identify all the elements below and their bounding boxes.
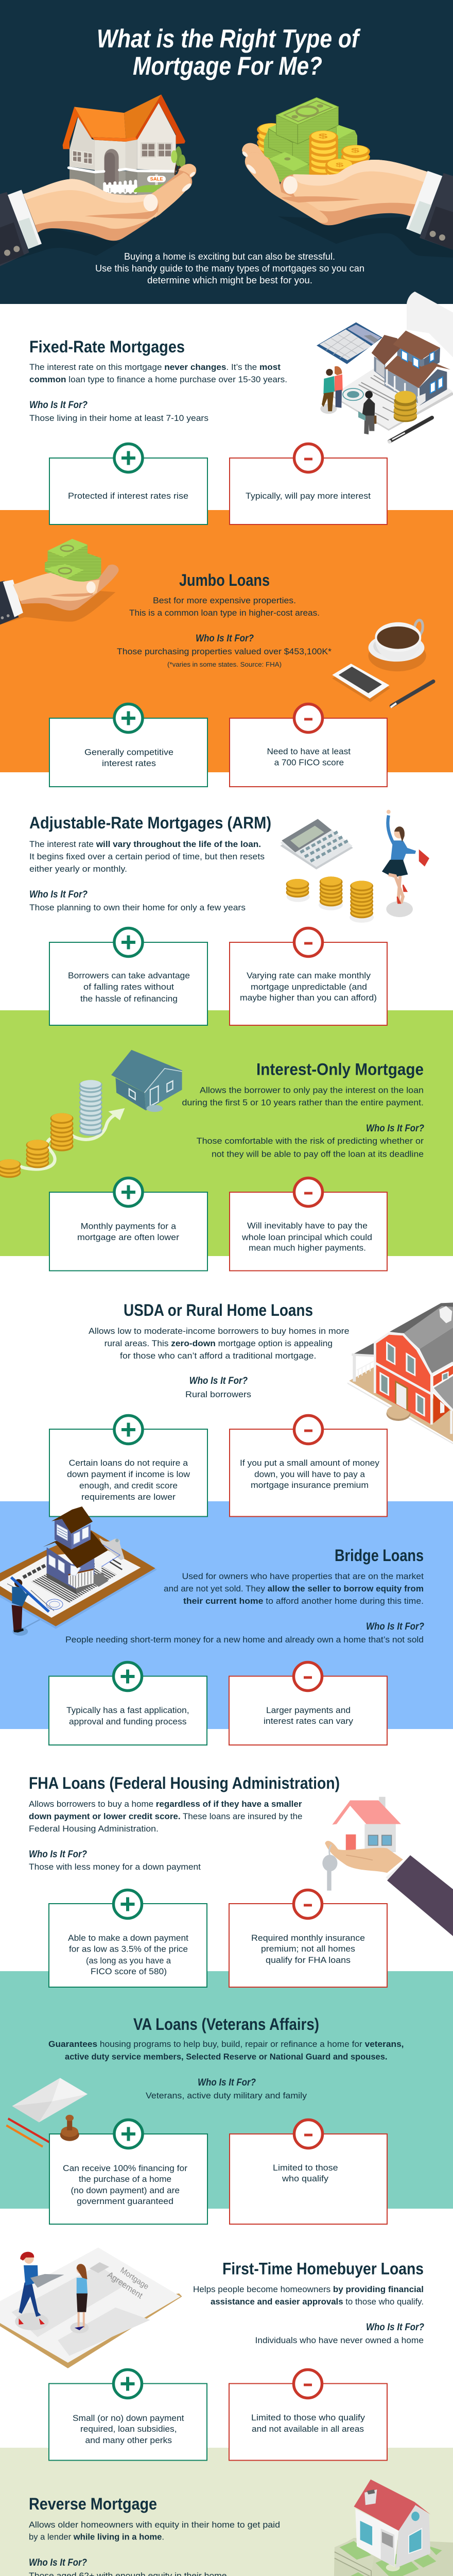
band: VA teal — [0, 1971, 453, 2209]
who is it for: Those planning to own their home for only a few years — [29, 903, 246, 912]
band: interest-only green — [0, 1010, 453, 1256]
icon: coffee cup, phone and pen — [332, 620, 433, 707]
icon: hand holding house and keys — [322, 1797, 410, 1891]
pro card: Protected if interest rates rise — [68, 492, 188, 501]
heading: Jumbo Loans — [179, 571, 270, 589]
body text — [29, 1799, 303, 1834]
pro card: mortgage are often lower — [77, 1233, 180, 1242]
con card: whole loan principal which could — [241, 1233, 372, 1242]
body text: their current home to afford another home during this time. — [183, 1596, 424, 1606]
body text: active duty service members, Selected Reserve or National Guard and spouses. — [65, 2052, 387, 2062]
who is it for: Who Is It For? — [29, 400, 88, 411]
con card: down, you will have to pay a — [254, 1470, 365, 1479]
pro card — [49, 1662, 207, 1745]
pro card: Able to make a down payment — [68, 1934, 188, 1943]
heading: Adjustable-Rate Mortgages (ARM) — [29, 814, 271, 832]
body text: The interest rate on this mortgage never changes. It’s the most — [29, 362, 281, 372]
panel: adjustable-rate mortgages — [29, 810, 429, 1025]
con card: interest rates can vary — [264, 1717, 354, 1726]
heading: Interest-Only Mortgage — [256, 1060, 424, 1079]
who is it for: Who Is It For? — [189, 1376, 248, 1386]
pro card: government guaranteed — [77, 2197, 173, 2206]
intro text — [95, 251, 364, 285]
con card: who qualify — [282, 2174, 329, 2183]
con card: Need to have at least — [267, 747, 351, 756]
who is it for: Who Is It For? — [29, 889, 88, 900]
pro card: interest rates — [102, 759, 156, 768]
con card: a 700 FICO score — [274, 758, 344, 768]
con card: maybe higher than you can afford) — [240, 993, 377, 1003]
icon: envelope and pencils — [6, 2078, 88, 2147]
icon: calculator, house, people and document — [317, 292, 453, 444]
body text — [129, 596, 320, 618]
icon: house on money — [334, 2480, 453, 2576]
who is it for — [29, 2557, 226, 2576]
pro card: Typically has a fast application, — [66, 1706, 189, 1715]
body text: down payment or lower credit score. These loans are insured by the — [29, 1811, 303, 1821]
con card: If you put a small amount of money — [240, 1459, 380, 1468]
heading: VA Loans (Veterans Affairs) — [133, 2015, 319, 2033]
con card: Required monthly insurance — [251, 1934, 365, 1943]
con card — [230, 2120, 387, 2224]
body text: Allows older homeowners with equity in their home to get paid — [29, 2520, 280, 2530]
heading: Bridge Loans — [335, 1546, 424, 1565]
title — [97, 24, 361, 80]
pro card: (as long as you have a — [86, 1956, 171, 1965]
body text: Allows low to moderate-income borrowers to buy homes in more — [89, 1326, 349, 1336]
con card: Limited to those who qualify — [251, 2413, 365, 2422]
body text: for those who can’t afford a traditional mortgage. — [120, 1351, 316, 1361]
pro card: Certain loans do not require a — [69, 1459, 188, 1468]
pro card: Borrowers can take advantage — [68, 971, 190, 980]
who is it for: Who Is It For? — [29, 1849, 87, 1860]
pro card — [49, 704, 207, 787]
con card — [230, 1416, 387, 1517]
con card — [230, 928, 387, 1025]
who is it for — [255, 2322, 424, 2345]
con card: Larger payments and — [266, 1706, 351, 1715]
pro card — [49, 444, 207, 524]
who is it for: People needing short-term money for a new home and already own a home that’s not sold — [65, 1635, 424, 1645]
pro card: approval and funding process — [69, 1717, 186, 1726]
icon: house on clipboard with man — [0, 1506, 157, 1636]
body text — [164, 1571, 424, 1606]
body text — [29, 362, 287, 384]
who is it for: Individuals who have never owned a home — [255, 2335, 424, 2345]
body text — [29, 2520, 280, 2542]
who is it for: Rural borrowers — [185, 1389, 251, 1399]
con card — [229, 1662, 387, 1745]
icon: suit sleeve — [387, 1855, 453, 1936]
intro text: determine which might be best for you. — [147, 275, 312, 285]
icon: red barn house — [347, 1302, 453, 1444]
who is it for: not they will be able to pay off the loan at its deadline — [212, 1149, 424, 1159]
who is it for — [29, 1849, 201, 1872]
icon: right hand holding money and coins: $ — [351, 147, 360, 154]
pro card: for as low as 3.5% of the price — [69, 1944, 188, 1954]
icon: right hand holding money and coins — [241, 97, 453, 258]
icon: mortgage agreement book with two women and key: Agreement — [106, 2270, 144, 2301]
icon: left hand holding house: SALE — [150, 177, 163, 182]
who is it for: Those living in their home at least 7-10 years — [29, 413, 208, 423]
pro card: the purchase of a home — [79, 2175, 171, 2184]
con card: mortgage unpredictable (and — [251, 982, 367, 992]
panel: fixed-rate mortgages — [29, 292, 453, 524]
body text: Allows borrowers to buy a home regardless of if they have a smaller — [29, 1799, 302, 1809]
pro card — [49, 2370, 207, 2461]
con card — [229, 1890, 387, 1987]
icon: coins path to house — [0, 1050, 183, 1178]
icon: calculator, coins and jumping woman — [280, 810, 429, 923]
body text: Best for more expensive properties. — [153, 596, 296, 605]
pro card — [49, 1890, 207, 1987]
heading: FHA Loans (Federal Housing Administration) — [29, 1774, 340, 1792]
body text: This is a common loan type in higher-cost areas. — [129, 608, 320, 618]
pro card: and many other perks — [85, 2436, 172, 2445]
con card: and not available in all areas — [252, 2425, 364, 2434]
body text: rural areas. This zero-down mortgage option is appealing — [104, 1338, 333, 1348]
panel: reverse mortgage — [29, 2480, 453, 2576]
con card: Typically, will pay more interest — [246, 492, 371, 501]
band: hero background — [0, 0, 453, 304]
con card: Will inevitably have to pay the — [247, 1221, 368, 1230]
band: reverse sage — [0, 2448, 453, 2576]
who is it for — [117, 633, 332, 668]
pro card: enough, and credit score — [79, 1481, 178, 1490]
heading: USDA or Rural Home Loans — [124, 1301, 313, 1319]
who is it for: Veterans, active duty military and family — [146, 2091, 307, 2100]
icon: stamp — [60, 2115, 79, 2141]
panel: interest-only mortgage — [0, 1050, 424, 1270]
who is it for: Who Is It For? — [198, 2077, 256, 2088]
pro card: Generally competitive — [84, 748, 173, 757]
who is it for: Those comfortable with the risk of predicting whether or — [197, 1136, 424, 1146]
icon: mortgage agreement book with two women and key: Mortgage — [119, 2266, 150, 2292]
body text: by a lender while living in a home. — [29, 2532, 164, 2542]
pro card: Monthly payments for a — [81, 1222, 177, 1231]
title: Mortgage For Me? — [133, 52, 322, 80]
body text: either yearly or monthly. — [29, 864, 127, 874]
who is it for — [29, 889, 246, 912]
pro card — [49, 928, 207, 1025]
panel: USDA or rural home loans — [49, 1301, 453, 1517]
who is it for: Who Is It For? — [196, 633, 254, 644]
panel: jumbo loans — [0, 539, 433, 787]
who is it for: Who Is It For? — [29, 2557, 87, 2568]
band: jumbo orange — [0, 510, 453, 772]
who is it for — [29, 400, 208, 423]
icon: hand holding money — [0, 539, 119, 635]
pro card — [49, 1178, 207, 1270]
pro card: down payment if income is low — [67, 1470, 190, 1479]
con card — [230, 1178, 387, 1270]
con card: qualify for FHA loans — [266, 1956, 351, 1965]
con card — [230, 444, 387, 524]
body text: and are not yet sold. They allow the seller to borrow equity from — [164, 1584, 424, 1594]
who is it for — [197, 1123, 424, 1159]
body text — [89, 1326, 349, 1361]
pro card — [49, 2120, 207, 2224]
con card: Varying rate can make monthly — [247, 971, 371, 980]
title: What is the Right Type of — [97, 24, 361, 53]
body text — [29, 839, 265, 874]
who is it for: Who Is It For? — [366, 2322, 424, 2333]
panel: FHA loans — [29, 1774, 453, 1987]
who is it for — [185, 1376, 251, 1399]
icon: mortgage agreement book with two women and key — [0, 2247, 182, 2368]
pro card: of falling rates without — [83, 982, 174, 992]
body text: Federal Housing Administration. — [29, 1824, 159, 1834]
body text: The interest rate will vary throughout the life of the loan. — [29, 839, 261, 849]
panel: first-time homebuyer loans — [0, 2247, 424, 2461]
intro text: Use this handy guide to the many types of mortgages so you can — [95, 263, 364, 274]
who is it for — [146, 2077, 307, 2100]
con card: mortgage insurance premium — [251, 1481, 369, 1490]
pro card: FICO score of 580) — [91, 1967, 167, 1976]
pro card — [49, 1416, 207, 1517]
panel: VA loans — [6, 2015, 404, 2224]
heading: First-Time Homebuyer Loans — [222, 2260, 424, 2278]
icon: right hand holding money and coins: $ — [336, 162, 344, 168]
icon: right hand holding money and coins: $ — [318, 132, 328, 140]
body text: It begins fixed over a certain period of time, but then resets — [29, 852, 265, 861]
who is it for: Those purchasing properties valued over $453,100K* — [117, 647, 332, 656]
body text: assistance and easier approvals to those who qualify. — [211, 2297, 424, 2307]
heading: Reverse Mortgage — [29, 2495, 157, 2513]
pro card: the hassle of refinancing — [80, 994, 178, 1004]
heading: Fixed-Rate Mortgages — [29, 337, 185, 356]
band: bridge blue — [0, 1501, 453, 1729]
body text — [193, 2284, 424, 2307]
pro card: Small (or no) down payment — [73, 2414, 184, 2423]
body text: Guarantees housing programs to help buy, build, repair or refinance a home for veterans, — [48, 2039, 404, 2049]
pro card: required, loan subsidies, — [80, 2425, 177, 2434]
panel: bridge loans — [0, 1506, 424, 1745]
who is it for: Who Is It For? — [366, 1123, 424, 1134]
pro card: (no down payment) and are — [71, 2186, 180, 2195]
con card — [230, 704, 387, 787]
pro card: Can receive 100% financing for — [63, 2164, 188, 2173]
intro text: Buying a home is exciting but can also be stressful. — [124, 251, 335, 262]
con card: mean much higher payments. — [249, 1244, 366, 1253]
body text: Allows the borrower to only pay the interest on the loan — [200, 1086, 424, 1095]
who is it for: (*varies in some states. Source: FHA) — [167, 660, 282, 668]
pro card: requirements are lower — [81, 1493, 176, 1502]
con card: Limited to those — [273, 2163, 338, 2173]
body text: Helps people become homeowners by providing financial — [193, 2284, 424, 2294]
icon: left hand holding house — [0, 94, 196, 304]
who is it for: Those with less money for a down payment — [29, 1862, 201, 1872]
who is it for: Who Is It For? — [366, 1621, 424, 1632]
panel: hero — [0, 24, 453, 304]
body text — [48, 2039, 404, 2062]
con card: premium; not all homes — [261, 1944, 355, 1954]
body text: during the first 5 or 10 years rather than the entire payment. — [182, 1098, 424, 1108]
who is it for — [65, 1621, 424, 1645]
body text — [182, 1086, 424, 1108]
con card — [229, 2370, 387, 2461]
body text: Used for owners who have properties that are on the market — [182, 1571, 424, 1581]
body text: common loan type to finance a home purchase over 15-30 years. — [29, 375, 287, 384]
